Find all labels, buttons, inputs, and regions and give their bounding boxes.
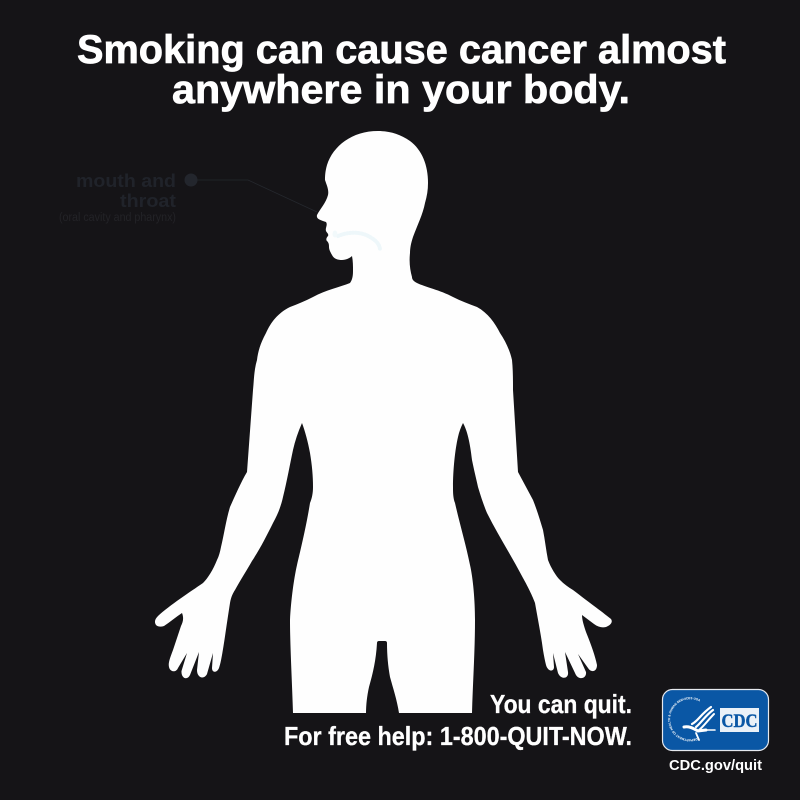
icon: CDC logo: CDC: [722, 711, 758, 732]
CDC URL: CDC.gov/quit: [669, 758, 762, 774]
callout: mouth and throat: [59, 171, 317, 224]
title: anywhere in your body.: [172, 68, 630, 112]
callout dot: [184, 174, 198, 186]
title: Smoking can cause cancer almost: [77, 28, 726, 72]
quit message: You can quit.: [490, 689, 632, 719]
icon: CDC logo: [662, 688, 770, 752]
callout label: mouth and: [76, 171, 176, 191]
mouth and throat highlight: [332, 230, 380, 249]
logo CDC box: [720, 708, 759, 732]
logo seal ring text: DEPARTMENT OF HEALTH & HUMAN SERVICES USA: [668, 697, 700, 742]
callout label: throat: [120, 191, 176, 211]
callout label: [59, 171, 176, 224]
logo eagle: [684, 707, 715, 740]
body silhouette: [155, 131, 612, 713]
quit message: For free help: 1-800-QUIT-NOW.: [284, 721, 632, 751]
callout label: (oral cavity and pharynx): [59, 212, 176, 224]
title: [77, 28, 726, 112]
quit message: [284, 689, 632, 751]
callout leader line: [197, 180, 317, 212]
